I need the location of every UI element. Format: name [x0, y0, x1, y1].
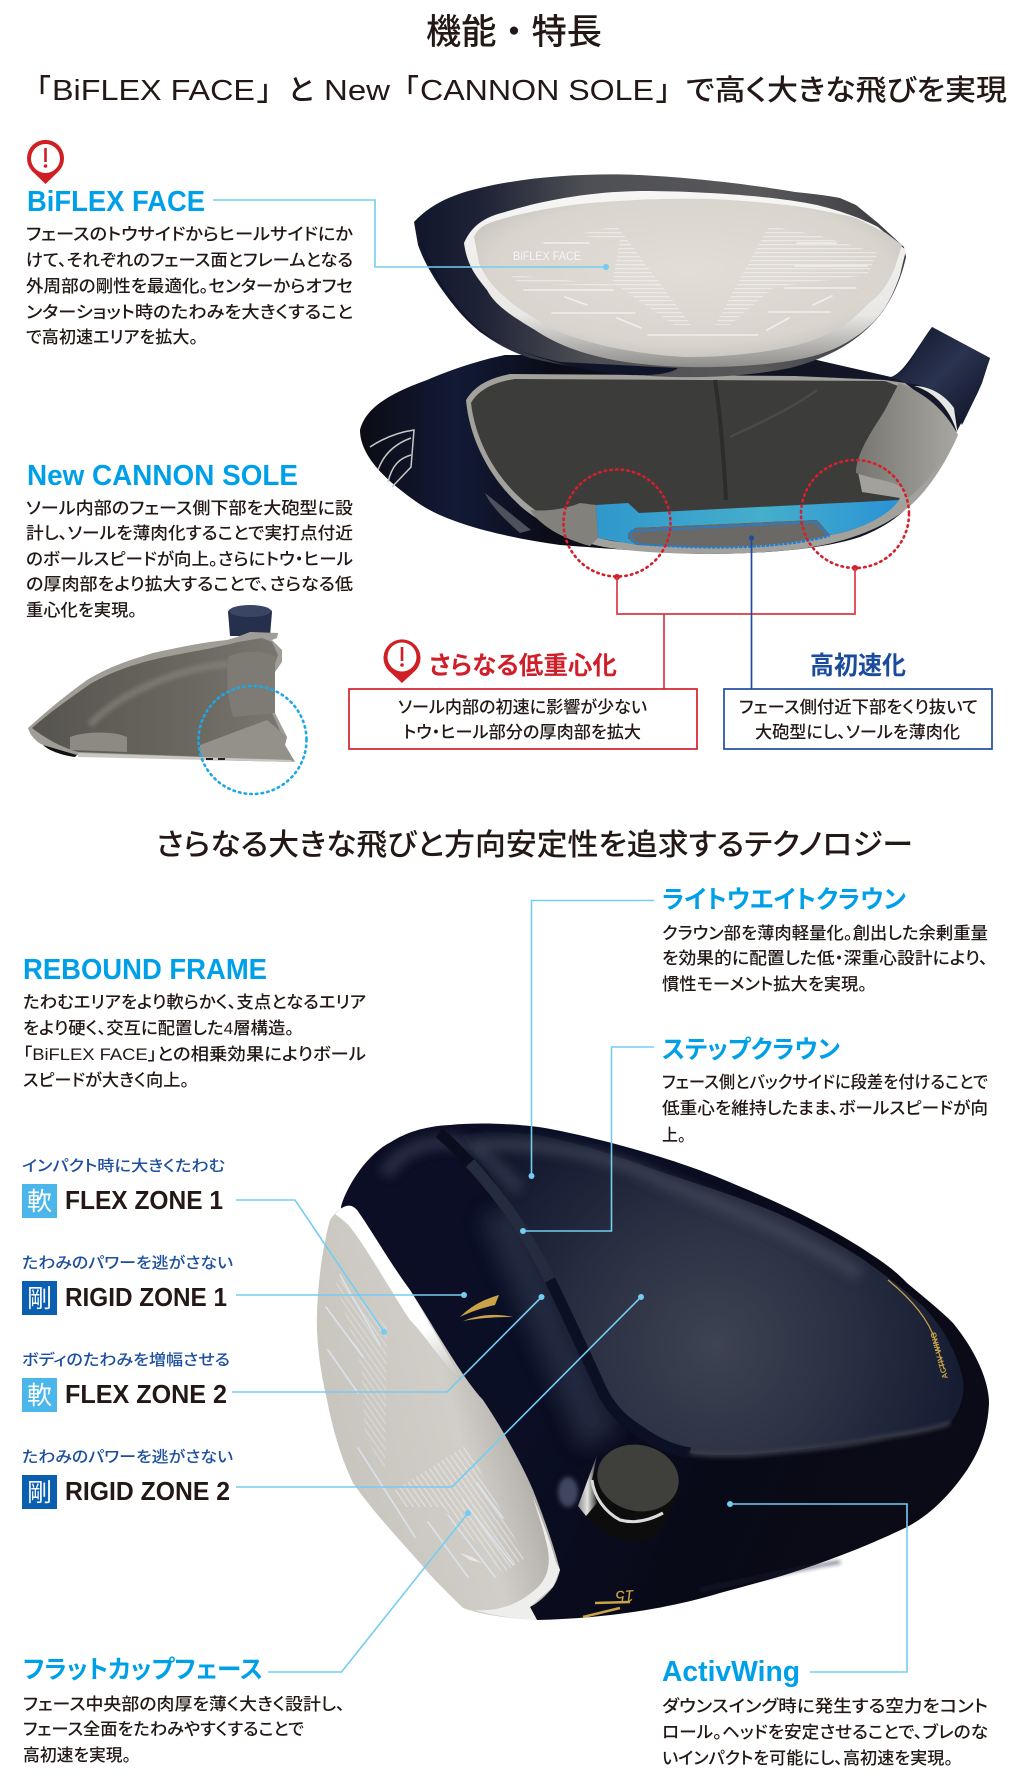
subtitle: BiFLEX FACE: [52, 75, 255, 107]
body text: フェースのトウサイドからヒールサイドにか: [26, 225, 353, 244]
zone: RIGID ZONE 2: [22, 1447, 233, 1509]
leader: BiFLEX FACE: [213, 200, 609, 270]
panel: Flat cup face text: [23, 1656, 345, 1765]
title: 機能・特長: [426, 13, 602, 52]
body text: 上。: [662, 1126, 686, 1145]
box: [349, 689, 697, 749]
body text: クラウン部を薄肉軽量化。創出した余剰重量: [662, 924, 988, 943]
callout: BiFLEX FACE warning pin icon: [27, 140, 64, 184]
zone: RIGID ZONE 1: RIGID ZONE 1: [65, 1282, 227, 1312]
leader: Flat cup face: [268, 1510, 471, 1672]
subtitle: 「: [36, 74, 51, 107]
body text: ソール内部のフェース側下部を大砲型に設: [26, 499, 353, 518]
badge: [22, 1378, 57, 1412]
body text: [662, 924, 988, 994]
illustration: sole cross-section: [28, 605, 306, 794]
body text: フェース中央部の肉厚を薄く大きく設計し、: [23, 1695, 345, 1714]
body text: [23, 1695, 345, 1765]
zone: FLEX ZONE 2: ボディのたわみを増幅させる: [22, 1350, 230, 1369]
box: フェース側付近下部をくり抜いて: [739, 698, 978, 717]
gold loft marking: 15: [614, 1586, 635, 1606]
face grooves: [326, 1273, 525, 1577]
body text: ダウンスイング時に発生する空力をコント: [662, 1696, 988, 1716]
badge: [22, 1281, 57, 1315]
heading: ActivWing: [662, 1656, 800, 1688]
white face rim: [335, 1206, 462, 1382]
body text: 重心化を実現。: [26, 601, 137, 620]
body text: ロール。ヘッドを安定させることで、ブレのな: [662, 1722, 988, 1742]
body text: ンターショット時のたわみを大きくすること: [26, 303, 353, 322]
subtitle: と: [288, 75, 314, 107]
body text: スピードが大きく向上。: [23, 1070, 189, 1090]
body text: フェース側とバックサイドに段差を付けることで: [662, 1073, 988, 1092]
leader: ActivWing: [727, 1501, 907, 1672]
callout: high initial speed: [724, 652, 992, 749]
box: ソール内部の初速に影響が少ない: [398, 697, 647, 717]
body text: [662, 1073, 988, 1145]
body text: [26, 499, 353, 620]
heading: BiFLEX FACE: [27, 186, 205, 218]
body text: のボールスピードが向上。さらにトウ・ヒール: [26, 549, 353, 569]
subtitle: 「: [404, 74, 419, 107]
body text: の厚肉部をより拡大することで、さらなる低: [26, 575, 353, 594]
body text: [26, 225, 353, 347]
body text: 慣性モーメント拡大を実現。: [662, 975, 867, 994]
heading: New CANNON SOLE: [27, 460, 298, 492]
zone: RIGID ZONE 2: たわみのパワーを逃がさない: [22, 1447, 233, 1466]
gold crown lettering: [888, 1280, 950, 1380]
illustration: driver face view: [414, 174, 906, 377]
illustration: driver head cutaway with sole interior: [360, 327, 990, 554]
panel: BiFLEX FACE text: [26, 186, 353, 347]
body text: フェース全面をたわみやすくすることで: [23, 1720, 304, 1739]
zone: FLEX ZONE 2: [22, 1350, 230, 1412]
leader: Step crown: [520, 1047, 654, 1234]
subtitle: 」: [655, 75, 671, 107]
body text: けて、それぞれのフェース面とフレームとなる: [26, 251, 353, 270]
face: [317, 1206, 560, 1620]
body text: 「BiFLEX FACE」との相乗効果によりボール: [23, 1045, 366, 1064]
gold loft marking: [583, 1586, 635, 1617]
subtitle: で高く大きな飛びを実現: [686, 74, 1007, 107]
body text: を効果的に配置した低・深重心設計により、: [662, 949, 988, 968]
leaders: zones to head: [232, 1200, 644, 1487]
zone: RIGID ZONE 2: RIGID ZONE 2: [65, 1476, 230, 1506]
body text: 低重心を維持したまま、ボールスピードが向: [662, 1098, 988, 1118]
adjustable weight: [578, 1437, 685, 1541]
illustration: large driver head top view: [317, 1124, 989, 1620]
body text: [23, 993, 366, 1090]
subtitle: 」: [256, 75, 272, 107]
heading: フラットカップフェース: [23, 1656, 263, 1684]
body text: いインパクトを可能にし、高初速を実現。: [662, 1749, 953, 1768]
box: [724, 689, 992, 749]
badge: [22, 1184, 57, 1218]
body text: [662, 1696, 988, 1768]
dotted circles and connectors: toe and heel: [564, 460, 909, 689]
leader: Lightweight crown: [528, 900, 654, 1179]
badge: 軟: [27, 1382, 52, 1410]
badge: [22, 1475, 57, 1509]
section heading: さらなる大きな飛びと方向安定性を追求するテクノロジー: [156, 829, 913, 862]
zone: FLEX ZONE 2: FLEX ZONE 2: [65, 1379, 227, 1409]
heading: さらなる低重心化: [429, 652, 617, 680]
dotted highlight circle: [198, 686, 306, 794]
panel: REBOUND FRAME text: [23, 954, 366, 1090]
panel: Step crown text: [662, 1036, 988, 1145]
panel: New CANNON SOLE text: [26, 460, 353, 620]
zone: FLEX ZONE 1: [22, 1157, 225, 1218]
subtitle: CANNON SOLE: [420, 75, 654, 107]
badge: 剛: [27, 1479, 52, 1507]
body text: で高初速エリアを拡大。: [26, 328, 198, 347]
heading: REBOUND FRAME: [23, 954, 267, 986]
badge: 軟: [27, 1188, 52, 1216]
callout: low centre of gravity: [349, 639, 697, 749]
body text: 計し、ソールを薄肉化することで実打点付近: [26, 524, 353, 543]
box: 大砲型にし、ソールを薄肉化: [755, 723, 960, 742]
icon: warning pin: [384, 639, 420, 683]
zone: FLEX ZONE 1: インパクト時に大きくたわむ: [22, 1157, 225, 1175]
body text: をより硬く、交互に配置した4層構造。: [23, 1019, 294, 1038]
body text: 外周部の剛性を最適化。センターからオフセ: [26, 277, 353, 296]
zone: RIGID ZONE 1: [22, 1253, 233, 1315]
badge: 剛: [27, 1285, 52, 1313]
gold crown lettering: ACTIV WING: [929, 1331, 950, 1380]
zone: RIGID ZONE 1: たわみのパワーを逃がさない: [22, 1253, 233, 1272]
illustration: driver face view: BiFLEX FACE: [513, 249, 581, 263]
zone: FLEX ZONE 1: FLEX ZONE 1: [65, 1185, 223, 1215]
panel: ActivWing text: [662, 1656, 988, 1768]
heading: ライトウエイトクラウン: [662, 886, 906, 914]
gold logo mark: [460, 1295, 513, 1321]
heading: ステップクラウン: [662, 1036, 840, 1064]
body text: たわむエリアをより軟らかく、支点となるエリア: [23, 993, 366, 1012]
heading: 高初速化: [810, 652, 906, 680]
connector: blue pocket: [749, 535, 754, 689]
panel: Lightweight crown text: [662, 886, 988, 994]
box: トウ・ヒール部分の厚肉部を拡大: [403, 723, 641, 742]
body text: 高初速を実現。: [23, 1746, 131, 1765]
subtitle: New: [324, 75, 391, 107]
